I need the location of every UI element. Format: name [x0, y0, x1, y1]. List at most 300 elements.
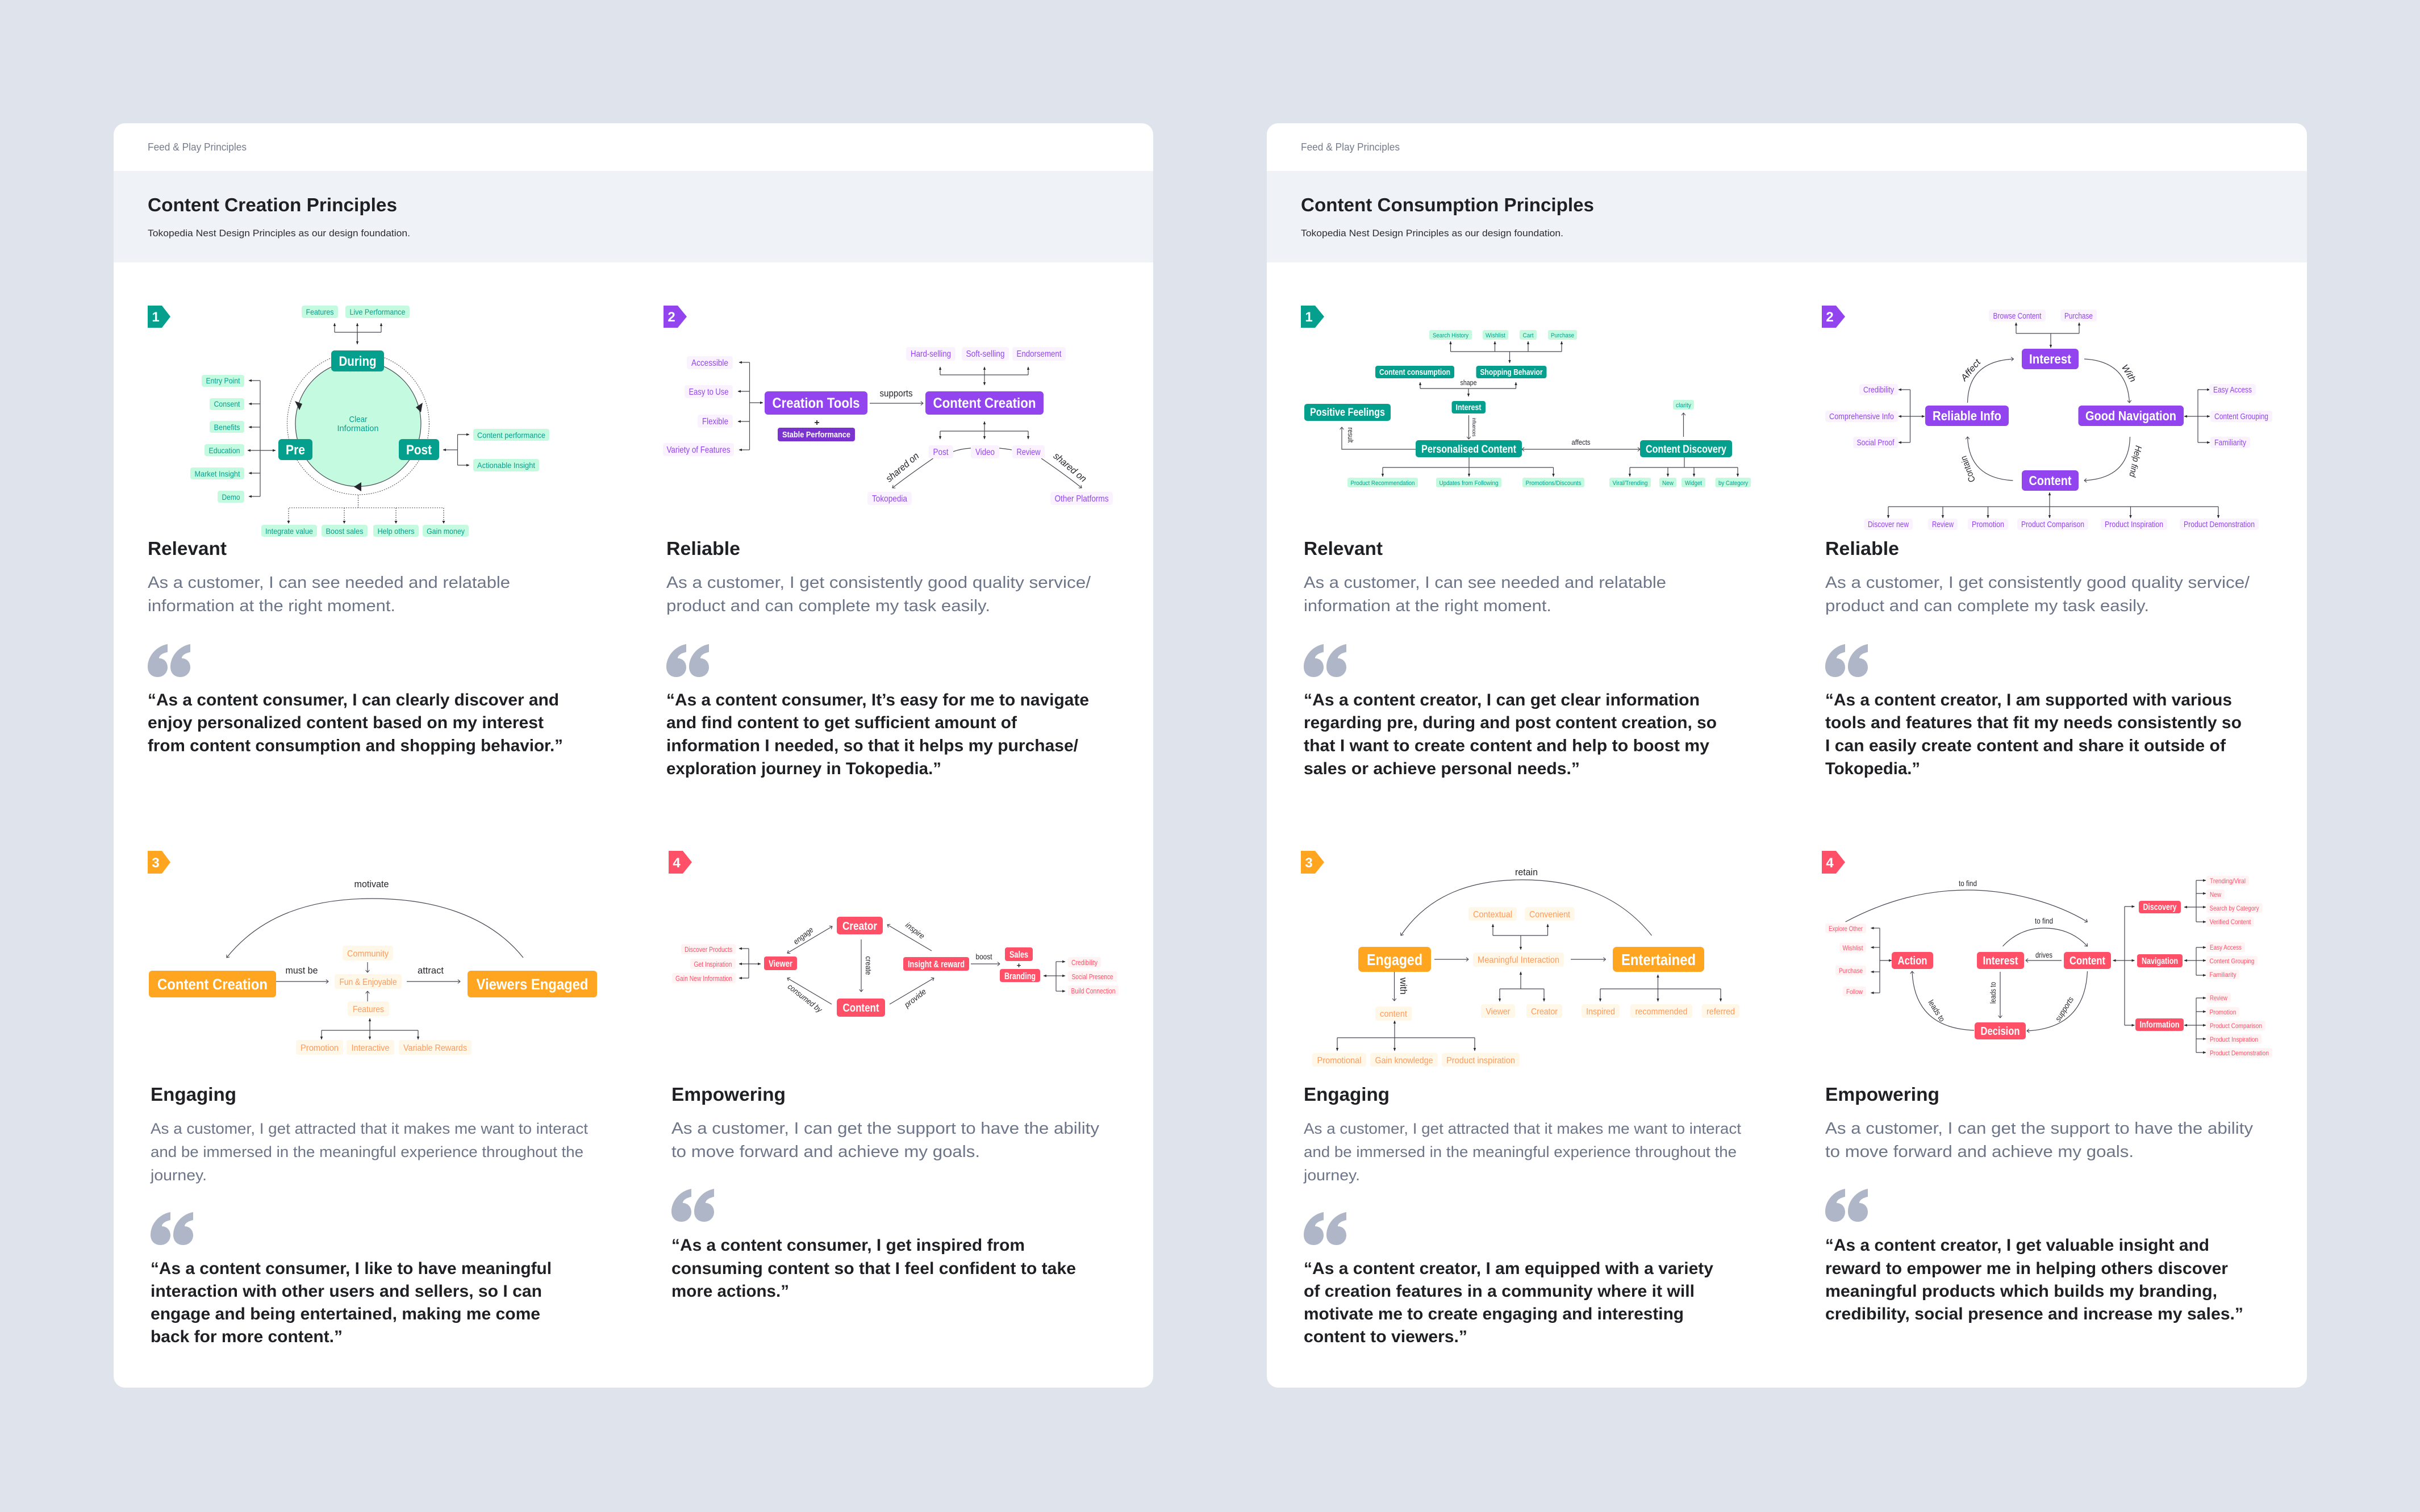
text block: Engaging: and be immersed in the meaningful experience throughout the [151, 1143, 583, 1160]
labels: Affect [1959, 357, 1983, 383]
chips: Product Inspiration [2105, 520, 2163, 529]
chips: Accessible [691, 358, 728, 368]
node: Content Creation [149, 971, 276, 997]
node: Information [2135, 1018, 2184, 1031]
diagram: engaged to entertained [1312, 867, 1739, 1067]
text block: Reliable [666, 538, 1091, 778]
chips: Viewer [1486, 1007, 1511, 1017]
node: Content [837, 999, 885, 1017]
arrow: supports [870, 403, 923, 404]
text block: Relevant: from content consumption and shopping behavior.” [148, 736, 563, 755]
node: Discovery: Discovery [2143, 903, 2177, 912]
badge 1: 1 [152, 310, 160, 325]
icon: quote [1304, 644, 1346, 677]
labels: shared on: shared on [1052, 450, 1088, 484]
chips: pre: Market Insight [194, 469, 240, 478]
text block: Reliable: tools and features that fit my needs consistently so [1825, 713, 2242, 732]
text block: Engaging: Engaging [151, 1084, 236, 1105]
node: Content: Content [2069, 955, 2105, 967]
chips: pre: Entry Point [206, 376, 240, 385]
text block: Empowering: As a customer, I can get the support to have the ability [1825, 1120, 2254, 1138]
connectors [1871, 880, 2206, 1052]
connectors [1888, 323, 2218, 518]
node: Navigation [2137, 954, 2183, 967]
chips [1347, 330, 1751, 487]
chips: Convenient [1529, 910, 1570, 920]
text block: Reliable: Reliable [666, 538, 740, 559]
chips: Features [353, 1005, 384, 1014]
chips: Search by Category [2210, 904, 2259, 912]
node: Navigation: Navigation [2142, 957, 2178, 966]
panel: Content Consumption Principles [1267, 123, 2307, 1388]
text block: Engaging: As a customer, I get attracted that it makes me want to interact [151, 1120, 589, 1137]
connectors [276, 962, 460, 1039]
text block: Engaging: and be immersed in the meaningful experience throughout the [1304, 1143, 1737, 1160]
node: Discovery [2139, 901, 2181, 913]
badge 4: 4 [1826, 855, 1834, 871]
icon: quote [1825, 1189, 1868, 1222]
chips: Purchase [1839, 967, 1863, 975]
text block: Empowering: to move forward and achieve my goals. [671, 1143, 980, 1161]
chips: Endorsement [1017, 349, 1062, 359]
node: During: During [339, 354, 376, 369]
node: Content Creation: Content Creation [933, 395, 1036, 411]
chips: Credibility [1071, 958, 1098, 967]
chips [1825, 876, 2272, 1058]
text block: Empowering: Empowering [671, 1084, 786, 1105]
chips: post [473, 429, 549, 471]
labels [1398, 867, 1538, 995]
node: Sales: Sales [1009, 949, 1028, 960]
chips: Wishlist [1843, 944, 1863, 952]
arc: retain [1401, 880, 1652, 935]
node: Positive Feelings [1304, 404, 1391, 421]
node: Interest: Interest [2029, 352, 2071, 366]
chips: Search History [1433, 332, 1468, 339]
chips: Social Presence [1071, 972, 1113, 981]
node: Content consumption [1375, 366, 1454, 378]
diagram: pre during post cycle [190, 306, 549, 537]
connectors [1342, 341, 1738, 477]
connectors [1337, 924, 1721, 1051]
text block: Reliable: “As a content consumer, It’s easy for me to navigate [666, 691, 1089, 709]
chips: by Category [1718, 480, 1748, 487]
text block: Relevant [1304, 538, 1717, 778]
text block: Reliable: As a customer, I get consistently good quality service/ [1825, 574, 2250, 592]
arrows [739, 925, 1065, 1004]
icon: quote [1825, 644, 1868, 677]
chips: Promotions/Discounts [1526, 480, 1582, 487]
chips: Build Connection [1071, 987, 1116, 995]
labels [1926, 879, 2075, 1024]
text block: Empowering: “As a content consumer, I get inspired from [671, 1236, 1025, 1255]
text block: Engaging: motivate me to create engaging and interesting [1304, 1305, 1684, 1323]
chips: New [2210, 891, 2221, 899]
badge 4 [1822, 851, 1845, 874]
node: Reliable Info: Reliable Info [1933, 408, 2001, 423]
text block: Empowering: “As a content creator, I get valuable insight and [1825, 1236, 2209, 1255]
diagram: creator content viewer loop [672, 917, 1119, 1017]
node: Content: Content [843, 1002, 879, 1014]
text block: Engaging: Engaging [1304, 1084, 1390, 1105]
chips: post: Actionable Insight [477, 461, 535, 470]
text block: Reliable: exploration journey in Tokopedia.” [666, 759, 941, 778]
labels: With [2119, 363, 2138, 384]
chips: Comprehensive Info [1829, 412, 1894, 421]
labels: result [1346, 427, 1355, 443]
diagram: creation tools [663, 347, 1113, 505]
labels: motivate [354, 879, 389, 889]
breadcrumb: Feed & Play Principles [1301, 141, 1400, 153]
text block: Empowering: credibility, social presence and increase my sales.” [1825, 1305, 2243, 1323]
chips: Contextual [1473, 910, 1512, 920]
badge 1 [148, 306, 170, 328]
chips: Trending/Viral [2210, 877, 2246, 885]
chips: referred [1706, 1007, 1735, 1017]
text block: Reliable [1825, 538, 2250, 778]
labels: retain [1515, 867, 1538, 878]
chips: Inspired [1586, 1007, 1615, 1017]
chips: pre: Benefits [214, 423, 240, 432]
connectors: during [335, 323, 381, 344]
chips: Easy Access [2210, 943, 2242, 951]
arc: motivate [227, 899, 523, 958]
chips [1312, 907, 1739, 1067]
panel: Content Creation Principles [114, 123, 1153, 1388]
node: Engaged: Engaged [1367, 951, 1422, 968]
text block: Relevant: sales or achieve personal needs.” [1304, 759, 1580, 778]
text block: Reliable: product and can complete my task easily. [666, 597, 990, 615]
chips: Follow [1846, 988, 1863, 996]
chips: outcomes: Gain money [427, 527, 465, 536]
text block: Empowering: As a customer, I can get the support to have the ability [671, 1120, 1100, 1138]
chips: Promotion [301, 1043, 339, 1053]
icon: quote [151, 1212, 193, 1245]
diagram: action interest content decision [1825, 876, 2272, 1058]
chips: Promotional [1317, 1056, 1361, 1066]
node: Content [2064, 952, 2111, 969]
node: Content Discovery: Content Discovery [1646, 444, 1726, 456]
text block: Engaging: journey. [150, 1167, 207, 1184]
diagram: interest navigation content loop [1825, 310, 2272, 530]
chips: Content Grouping [2214, 412, 2268, 421]
text block: Reliable: product and can complete my task easily. [1825, 597, 2149, 615]
labels: create [864, 957, 873, 975]
chips: Product Inspiration [2210, 1035, 2258, 1043]
chips: clarity [1676, 402, 1691, 409]
node: Viewer: Viewer [769, 958, 792, 969]
badge 2: 2 [1826, 310, 1834, 325]
node: Personalised Content [1416, 440, 1522, 457]
badge 1 [1301, 306, 1324, 328]
node: Entertained [1613, 947, 1704, 972]
text block: Reliable: I can easily create content and share it outside of [1825, 736, 2226, 755]
node: Content Creation: Content Creation [157, 976, 268, 993]
text block: Reliable: Tokopedia.” [1825, 759, 1920, 778]
diagram: content creation to viewers engaged [149, 879, 597, 1055]
labels: Help find [2127, 445, 2143, 478]
labels: supports [2053, 995, 2075, 1023]
chips: Product Recommendation [1351, 480, 1415, 487]
chips: Product Demonstration [2184, 520, 2255, 529]
icon: quote [666, 644, 709, 677]
badge 3: 3 [152, 855, 160, 871]
text block: Relevant: enjoy personalized content based on my interest [148, 713, 544, 732]
badge 4: 4 [673, 855, 681, 871]
text block: Relevant: As a customer, I can see needed and relatable [1304, 574, 1666, 592]
chips: Discover Products [685, 945, 732, 954]
text block: Engaging: journey. [1303, 1167, 1360, 1184]
chips: Variety of Features [667, 445, 731, 455]
text block: Relevant: Relevant [1304, 538, 1383, 559]
icon: quote [1304, 1212, 1346, 1245]
node: Insight & reward: Insight & reward [908, 959, 965, 970]
text block: Reliable: “As a content creator, I am supported with various [1825, 691, 2232, 709]
chips: Flexible [702, 417, 728, 427]
chips: Review [1017, 448, 1041, 457]
chips: Review [1932, 520, 1954, 529]
connectors: bottom dotted [287, 495, 445, 524]
chips: Discover new [1868, 520, 1909, 529]
badge 3 [1301, 851, 1324, 874]
chips: Other Platforms [1054, 494, 1109, 504]
text block: Engaging [150, 1084, 589, 1346]
text block: Empowering: consuming content so that I feel confident to take [671, 1259, 1076, 1278]
labels [285, 879, 444, 976]
node: Branding: Branding [1004, 971, 1036, 981]
node: Creation Tools [765, 391, 867, 415]
node: During [331, 350, 384, 371]
labels: boost [976, 952, 992, 961]
text block: Relevant: As a customer, I can see needed and relatable [148, 574, 510, 592]
labels: to find [2035, 916, 2053, 925]
node: Shopping Behavior: Shopping Behavior [1480, 367, 1543, 377]
text block: Relevant: Relevant [148, 538, 227, 559]
labels: shared on [884, 450, 1088, 484]
chips: Familiarity [2214, 438, 2247, 448]
text block: Empowering: more actions.” [671, 1282, 789, 1301]
node: Stable Performance: Stable Performance [782, 430, 850, 440]
node: Insight & reward [903, 957, 969, 971]
node: Interest [1977, 952, 2024, 969]
chips: New [1662, 480, 1674, 487]
text block: Reliable: As a customer, I get consistently good quality service/ [666, 574, 1091, 592]
chips: Get Inspiration [694, 960, 732, 968]
labels: consumed by [786, 982, 824, 1014]
chips: Familiarity [2210, 971, 2236, 979]
chips: Video [975, 448, 995, 457]
chips: Verified Content [2210, 918, 2251, 926]
text block: Relevant [148, 538, 563, 755]
node: Decision: Decision [1980, 1025, 2020, 1038]
node: Interest: Interest [1455, 403, 1482, 412]
chips [296, 946, 472, 1055]
chips: Community [347, 949, 389, 959]
chips: Gain New Information [675, 974, 732, 983]
labels: shared on: shared on [884, 450, 921, 484]
text block: Relevant: regarding pre, during and post content creation, so [1304, 713, 1717, 732]
text block: Engaging: engage and being entertained, making me come [151, 1305, 540, 1323]
chips: Easy Access [2213, 386, 2252, 395]
chips: Viral/Trending [1612, 480, 1647, 487]
chips: Review [2210, 994, 2227, 1002]
chips [672, 944, 1119, 996]
labels [786, 920, 992, 1014]
text block: Relevant: information at the right moment. [148, 597, 395, 615]
chips: Tokopedia [872, 494, 907, 504]
plus: + [814, 418, 820, 428]
labels: with [1398, 977, 1409, 995]
text block: Relevant: that I want to create content and help to boost my [1304, 736, 1709, 755]
text block: Reliable: and find content to get sufficient amount of [666, 713, 1017, 732]
chips: Credibility [1863, 386, 1895, 395]
labels [1959, 357, 2143, 483]
icon: quote [671, 1189, 714, 1222]
text block: Engaging: content to viewers.” [1304, 1327, 1467, 1346]
text block: Empowering: reward to empower me in helping others discover [1825, 1259, 2228, 1278]
node: Stable Performance [778, 428, 855, 441]
node: Interest [2022, 349, 2079, 369]
badge 2 [1822, 306, 1845, 328]
text block: Empowering [1825, 1084, 2254, 1323]
node: Action: Action [1897, 955, 1927, 967]
node: Decision [1975, 1022, 2026, 1039]
labels: engage [791, 925, 815, 946]
chips: Post [933, 448, 949, 457]
chips: Hard-selling [911, 349, 951, 359]
node: Viewer [764, 957, 797, 970]
text block: Relevant: “As a content creator, I can get clear information [1304, 691, 1700, 709]
chips: Widget [1685, 480, 1702, 487]
diagram: personalised content [1304, 330, 1751, 487]
chips: Gain knowledge [1375, 1056, 1433, 1066]
badge 1: 1 [1305, 310, 1313, 325]
chips: outcomes: Boost sales [326, 527, 364, 536]
chips: Meaningful Interaction [1478, 955, 1559, 965]
badge 2: 2 [667, 310, 675, 325]
labels: influences [1471, 418, 1477, 437]
label: supports: supports [879, 388, 912, 399]
chips: outcomes: Help others [377, 527, 415, 536]
node: Shopping Behavior [1476, 366, 1546, 378]
badge 3 [148, 851, 170, 874]
breadcrumb: Feed & Play Principles [148, 141, 247, 153]
text block: Reliable: information I needed, so that it helps my purchase/ [666, 736, 1079, 755]
chips [1825, 310, 2272, 530]
connectors: pre [248, 381, 276, 496]
chips: Variable Rewards [403, 1043, 467, 1053]
chips: Explore Other [1829, 925, 1863, 933]
chips: outcomes [261, 525, 469, 537]
text block: Relevant: “As a content consumer, I can clearly discover and [148, 691, 559, 709]
node: Post: Post [406, 442, 432, 458]
text block: Relevant: information at the right moment. [1304, 597, 1551, 615]
text block: Engaging: As a customer, I get attracted that it makes me want to interact [1304, 1120, 1742, 1137]
node: Content Discovery [1640, 440, 1732, 457]
chips: content [1380, 1009, 1408, 1019]
text block: Empowering [671, 1084, 1100, 1301]
chips: outcomes: Integrate value [265, 527, 313, 536]
labels: drives [2035, 950, 2052, 959]
chips: during: Live Performance [350, 307, 406, 316]
node: Engaged [1358, 947, 1431, 972]
text block: Engaging: “As a content consumer, I like to have meaningful [151, 1259, 552, 1278]
chips: Promotion [2210, 1008, 2236, 1016]
node: Post [399, 439, 439, 460]
node: Branding [1000, 969, 1040, 982]
labels: shape [1460, 378, 1477, 387]
labels: affects [1571, 438, 1591, 446]
node: Personalised Content: Personalised Content [1421, 444, 1517, 456]
node: Content consumption: Content consumption [1379, 367, 1450, 377]
node: Pre: Pre [286, 442, 305, 458]
node: Creator: Creator [842, 920, 877, 933]
labels: to find [1959, 879, 1977, 888]
node: Content Creation [925, 391, 1044, 415]
chips: pre: Education [209, 446, 240, 455]
chips: Purchase [1551, 332, 1574, 339]
node: Reliable Info [1925, 406, 2009, 426]
plus: + [1017, 961, 1021, 970]
badge 4 [669, 851, 692, 874]
chips: Cart [1522, 332, 1534, 339]
chips: Wishlist [1486, 332, 1505, 339]
node: Creation Tools: Creation Tools [773, 395, 860, 411]
chips: Browse Content [1993, 312, 2042, 321]
chips: Product Demonstration [2210, 1049, 2269, 1057]
text block: Empowering: meaningful products which builds my branding, [1825, 1282, 2217, 1301]
chips: Product Comparison [2210, 1022, 2262, 1030]
chips: Product inspiration [1446, 1056, 1515, 1066]
chips [663, 347, 1113, 505]
icon: quote [148, 644, 190, 677]
badge 2 [664, 306, 687, 328]
title: Content Consumption Principles [1301, 194, 1594, 215]
text block: Engaging [1303, 1084, 1742, 1346]
node: Interest: Interest [1983, 955, 2018, 967]
center text: Clear [349, 415, 367, 424]
text block: Reliable: Reliable [1825, 538, 1899, 559]
node: Good Navigation: Good Navigation [2085, 408, 2176, 423]
text block: Engaging: back for more content.” [151, 1327, 343, 1346]
labels: leads to [1926, 998, 1947, 1024]
chips: post: Content performance [477, 431, 545, 440]
badge 3: 3 [1305, 855, 1313, 871]
chips: during [302, 306, 410, 318]
center text [337, 415, 378, 433]
labels: provide [902, 987, 928, 1009]
node: Sales [1005, 947, 1033, 961]
chips: Creator [1531, 1007, 1558, 1017]
chips: Interactive [351, 1043, 390, 1053]
node: Creator [837, 917, 883, 934]
node: Viewers Engaged: Viewers Engaged [476, 976, 589, 993]
node: Action [1892, 952, 1933, 969]
labels: must be [285, 965, 318, 976]
node: Good Navigation [2078, 406, 2184, 426]
chips: Fun & Enjoyable [340, 978, 397, 987]
connectors [738, 362, 1082, 488]
chips: Easy to Use [689, 387, 729, 397]
chips: Updates from Following [1440, 480, 1499, 487]
labels: leads to [1988, 982, 1997, 1004]
chips: Content Grouping [2210, 957, 2254, 965]
text block: Empowering: to move forward and achieve my goals. [1825, 1143, 2134, 1161]
text block: Engaging: interaction with other users and sellers, so I can [151, 1282, 542, 1301]
curved arrows [1968, 359, 2130, 481]
chips: during: Features [306, 307, 334, 316]
node: Content: Content [2029, 473, 2072, 488]
